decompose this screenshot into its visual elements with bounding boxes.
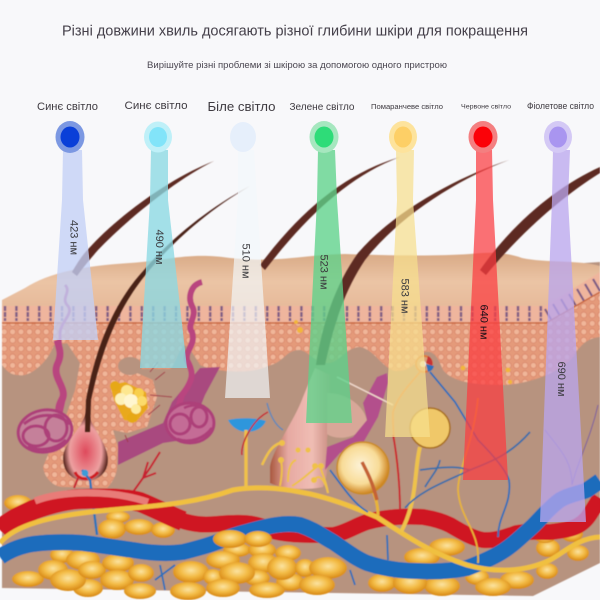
subtitle: Вирішуйте різні проблеми зі шкірою за допомогою одного пристрою [147, 60, 447, 71]
light labels [37, 99, 594, 114]
wavelength labels: 583 нм [398, 278, 410, 314]
sebaceous gland [110, 381, 148, 423]
light labels: Синє світло [37, 101, 98, 113]
sweat duct right [178, 282, 202, 408]
light labels: Біле світло [208, 99, 276, 114]
muscle by follicle [325, 373, 388, 470]
epidermis cells [2, 292, 600, 385]
light labels: Червоне світло [461, 102, 511, 110]
artery highlight [35, 493, 148, 502]
thin vessels [155, 372, 598, 590]
gland capillaries [125, 362, 172, 442]
corpuscle [416, 356, 434, 372]
skin illustration [0, 253, 600, 600]
band ticks [2, 279, 600, 321]
wavelength labels: 490 нм [153, 229, 165, 265]
green zone follicle [270, 368, 330, 489]
beam: red 640 [463, 121, 508, 480]
front fat cells [213, 530, 272, 548]
dermis gap in sheath [118, 357, 142, 375]
wavelength labels: 510 нм [240, 243, 252, 279]
beam: white 510 [225, 122, 270, 398]
blue vein [0, 481, 600, 571]
yellow nerve endings [262, 440, 328, 493]
beam: orange 583 [385, 121, 430, 437]
hair bulb [63, 408, 108, 535]
title: Різні довжини хвиль досягають різної глибини шкіри для покращення [62, 24, 528, 40]
light labels: Фіолетове світло [527, 101, 594, 111]
hairs [72, 157, 600, 432]
sweat coil left [15, 406, 75, 456]
tissue highlight [337, 377, 393, 405]
light labels: Зелене світло [290, 101, 355, 113]
wavelength labels [68, 220, 567, 397]
wavelength labels: 423 нм [68, 220, 80, 255]
light labels: Помаранчеве світло [371, 102, 443, 111]
wavelength labels: 690 нм [555, 361, 567, 397]
orange line under band [2, 292, 600, 323]
arrector muscle [118, 367, 220, 465]
round gland lower [337, 442, 389, 515]
light labels: Синє світло [124, 100, 188, 112]
orange nerve dots [294, 320, 512, 384]
stratum corneum [2, 253, 600, 310]
dermis [2, 262, 600, 596]
red capillaries [74, 452, 160, 492]
blue sensory receptor [228, 403, 283, 488]
sweat coil right [166, 403, 214, 443]
beam: cyan 490 [140, 122, 187, 368]
beam: violet 690 [540, 121, 586, 522]
round gland upper [401, 408, 450, 532]
beam: blue 423 [53, 121, 98, 340]
wavelength labels: 640 нм [478, 304, 490, 340]
red artery [0, 498, 600, 540]
back fat cells [4, 495, 589, 600]
dotted cell band [2, 272, 600, 326]
sweat duct left [56, 285, 69, 415]
yellow nerve [0, 488, 600, 570]
folded tissue [327, 393, 367, 438]
wavelength labels: 523 нм [318, 254, 330, 290]
beam: green 523 [306, 121, 352, 423]
follicle sheath [43, 343, 157, 488]
